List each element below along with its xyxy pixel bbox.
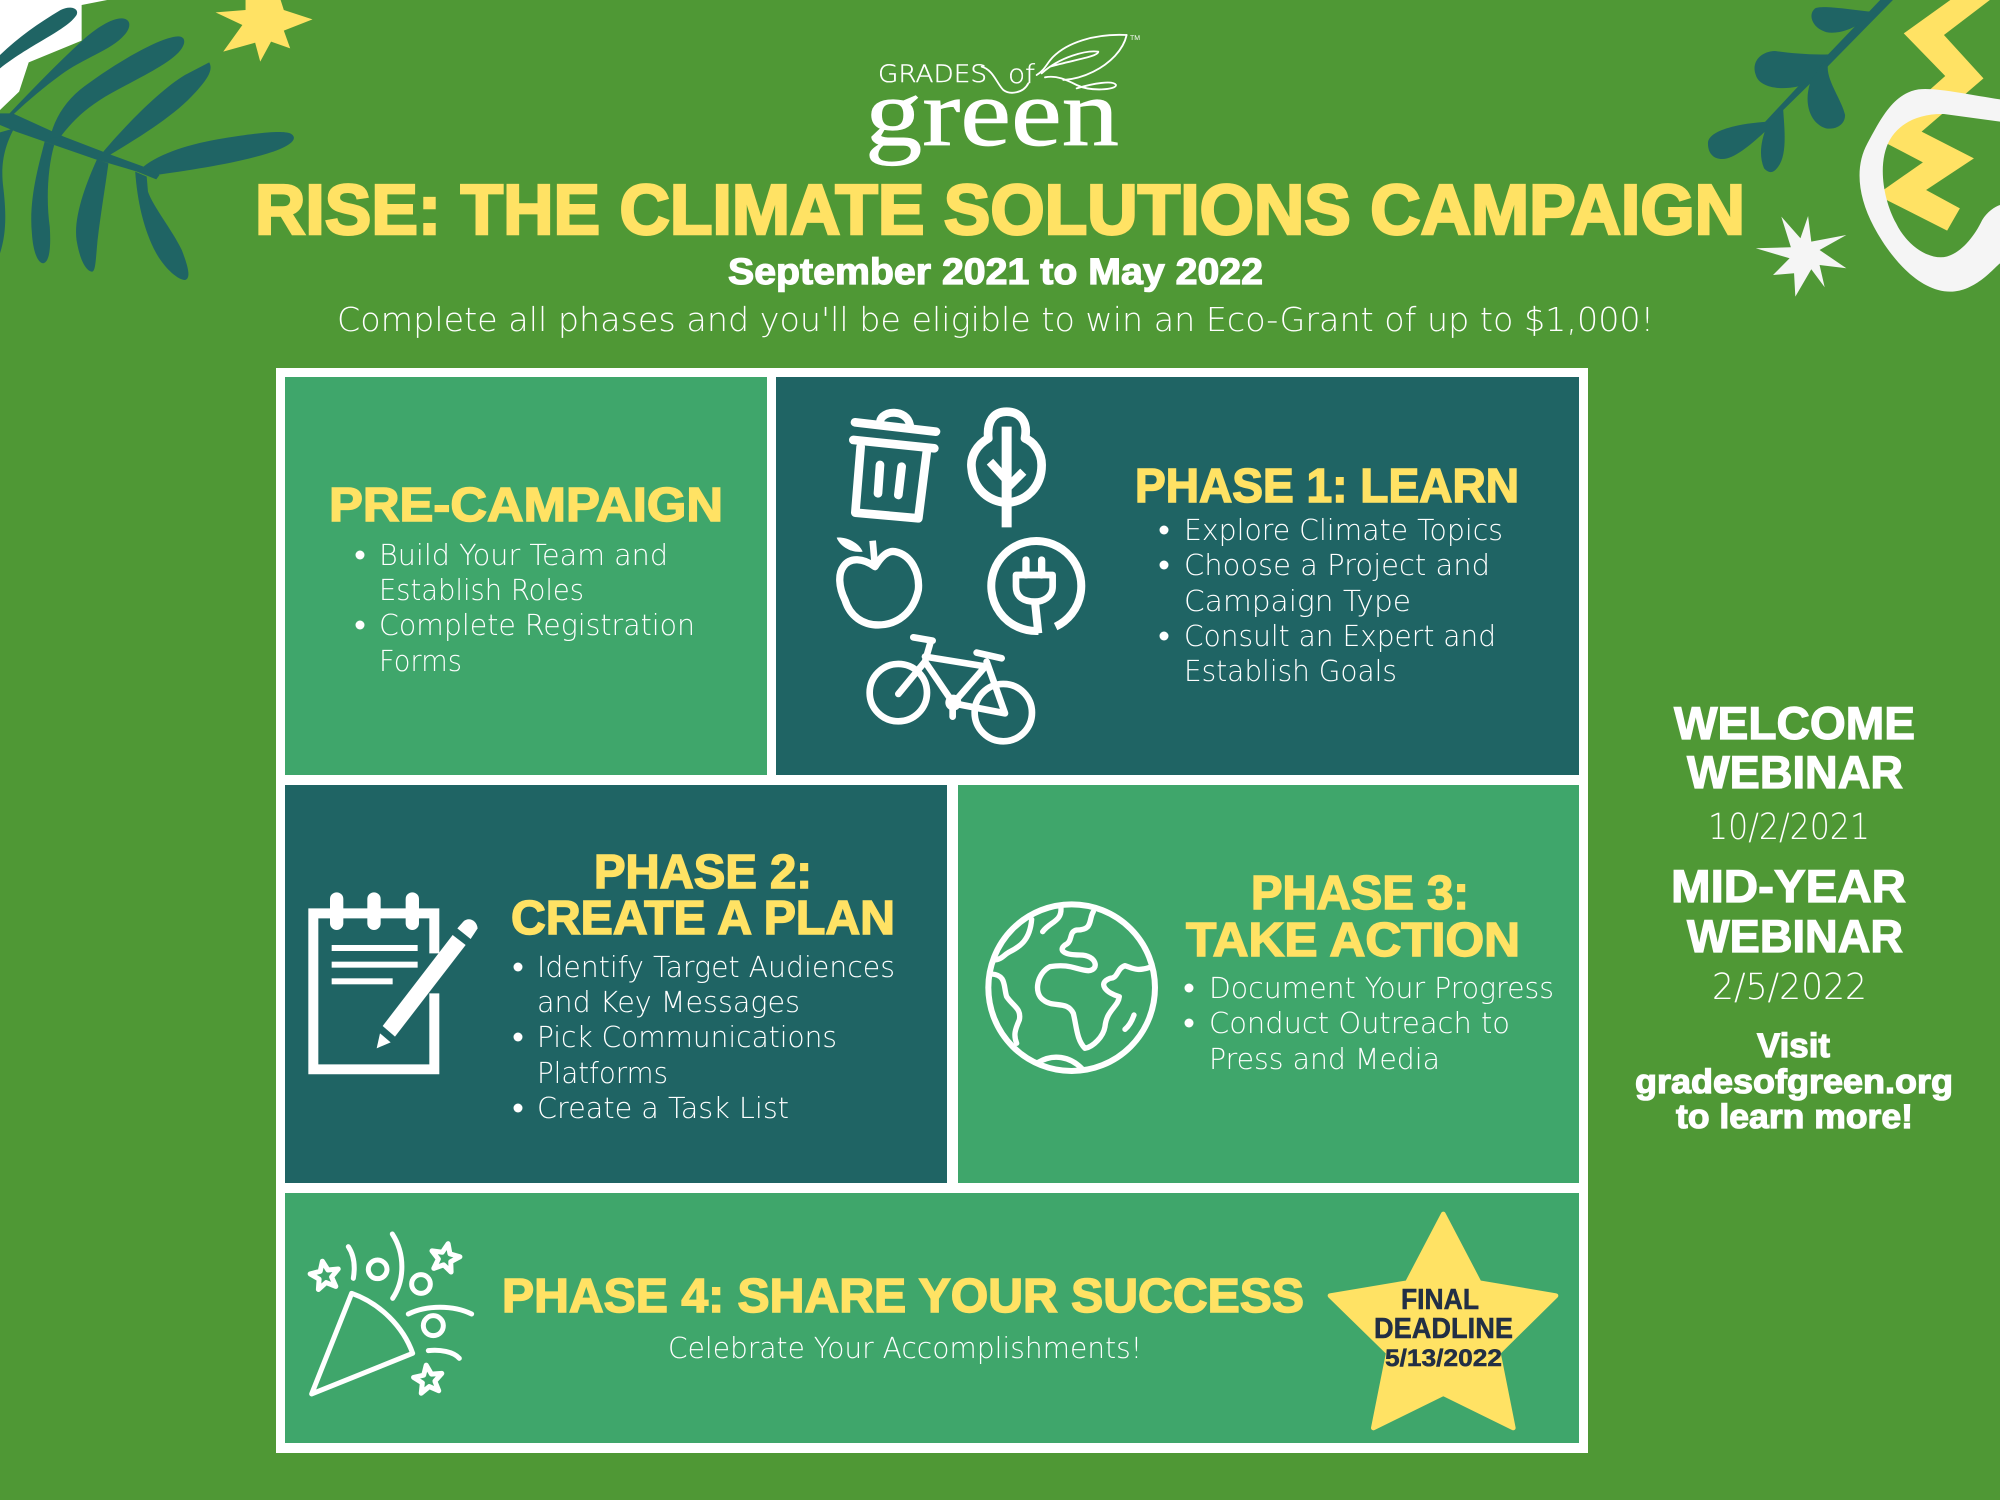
heading: phase 3: TAKE ACTION [1186,914,1520,967]
date: welcome webinar: 10/2/2021 [1708,807,1870,848]
list: phase 3 tasks: Conduct Outreach to [1209,1006,1510,1040]
text: welcome webinar: WELCOME [1674,697,1915,749]
text: website call to action: to learn more! [1676,1098,1913,1136]
decoration: top-right foliage, zigzag, ring and star [1708,0,2000,297]
panel: phase 3 take action [958,785,1579,1183]
icon: party popper [308,1234,472,1394]
logo: Grades of Green: of [1008,60,1036,90]
list: phase 3 tasks: Press and Media [1209,1042,1440,1076]
icon: tree [971,412,1042,527]
callout: final deadline star [1330,1214,1556,1428]
list: phase 2 tasks: and Key Messages [537,985,800,1019]
callout: final deadline star: FINAL [1401,1284,1479,1316]
callout: final deadline star: DEADLINE [1374,1313,1513,1345]
list: phase 2 tasks: Identify Target Audiences [537,950,895,984]
list: pre-campaign tasks: Establish Roles [379,573,584,607]
text: mid-year webinar: WEBINAR [1687,910,1903,962]
list: pre-campaign tasks: Build Your Team and [379,538,668,572]
list: phase 1 tasks: Establish Goals [1184,654,1397,688]
panel: pre-campaign [285,377,767,775]
icon: trash can [853,413,936,518]
text: mid-year webinar: MID-YEAR [1671,860,1906,912]
icon: plug [991,541,1081,633]
list: phase 2 tasks [514,950,895,1125]
text: welcome webinar: WEBINAR [1687,746,1903,798]
logo: Grades of Green: TM [1130,35,1140,42]
heading: phase 2: PHASE 2: [594,846,812,899]
icons: trash, tree, apple, plug, bicycle [837,412,1081,741]
white grid frame [276,368,1588,1453]
heading: pre-campaign: PRE-CAMPAIGN [329,479,723,532]
text: website call to action: gradesofgreen.org [1635,1063,1953,1101]
subtitle: eligibility: Complete all phases and you'll be eligible to win an Eco-Grant of up to $1,000! [337,300,1654,339]
list: phase 1 tasks: Explore Climate Topics [1184,513,1503,547]
panel: phase 4 share your success [285,1193,1579,1443]
panel: phase 2 create a plan [285,785,947,1183]
list: pre-campaign tasks: Forms [379,644,462,678]
logo: Grades of Green [865,35,1140,166]
panel: phase 1 learn [776,377,1579,775]
list: phase 2 tasks: Pick Communications [537,1020,837,1054]
text: website call to action: Visit [1757,1027,1830,1065]
icon: apple [837,538,919,625]
list: phase 1 tasks: Choose a Project and [1184,548,1490,582]
sidebar: webinars and website [1635,697,1953,1136]
list: phase 2 tasks: Create a Task List [537,1091,789,1125]
decoration: top-left foliage and star [0,0,313,280]
logo: Grades of Green: GRADES [878,60,987,88]
icon: globe [988,904,1155,1071]
heading: phase 3 [1186,867,1520,967]
heading: phase 2 [511,846,895,945]
subtitle: dates: September 2021 to May 2022 [728,251,1263,292]
list: phase 1 tasks: Consult an Expert and [1184,619,1496,653]
list: phase 1 tasks [1160,513,1503,688]
text: website call to action [1635,1027,1953,1136]
text: welcome webinar [1674,697,1915,798]
text: mid-year webinar [1671,860,1906,962]
list: pre-campaign tasks: Complete Registration [379,608,695,642]
text: celebrate: Celebrate Your Accomplishments! [668,1331,1142,1365]
date: mid-year webinar: 2/5/2022 [1712,967,1867,1008]
list: phase 2 tasks: Platforms [537,1056,668,1090]
icon: notepad and pencil [313,892,478,1069]
icon: bicycle [870,637,1032,741]
list: phase 3 tasks [1184,971,1554,1076]
logo: Grades of Green: green [865,59,1119,166]
list: pre-campaign tasks [356,538,695,678]
heading: phase 3: PHASE 3: [1251,867,1469,920]
title: RISE: THE CLIMATE SOLUTIONS CAMPAIGN [255,171,1745,250]
callout: final deadline star: 5/13/2022 [1385,1345,1502,1372]
heading: phase 4: PHASE 4: SHARE YOUR SUCCESS [502,1270,1304,1323]
heading: phase 2: CREATE A PLAN [511,892,895,945]
list: phase 3 tasks: Document Your Progress [1209,971,1554,1005]
list: phase 1 tasks: Campaign Type [1184,584,1411,618]
heading: phase 1: PHASE 1: LEARN [1135,460,1519,513]
